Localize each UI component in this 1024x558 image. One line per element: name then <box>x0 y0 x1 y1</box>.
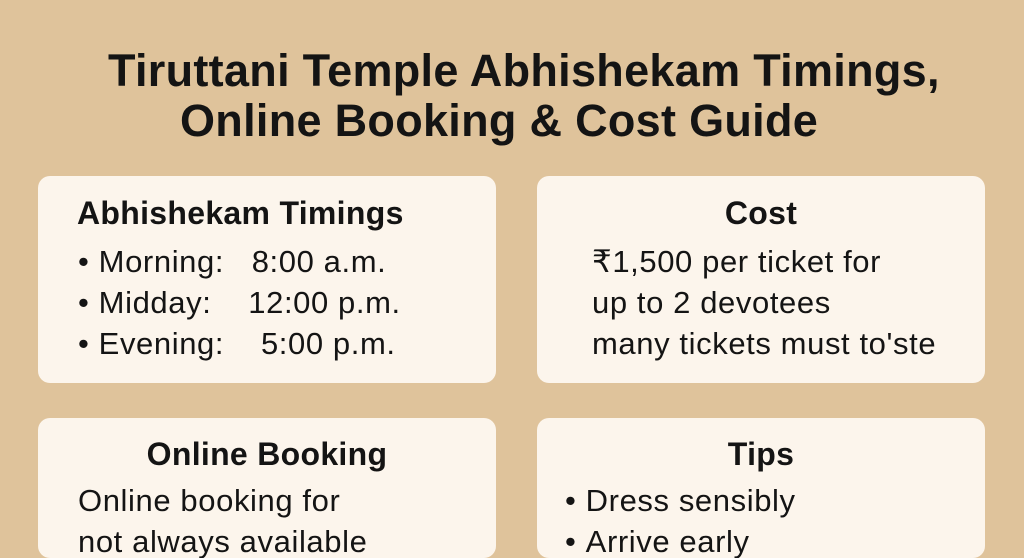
list: timings: • Midday: 12:00 p.m. <box>78 285 401 320</box>
text: cost: ₹1,500 per ticket for <box>592 244 881 279</box>
text: cost: many tickets must to'ste <box>592 326 936 361</box>
text: cost <box>592 244 936 361</box>
text: online booking: not always available <box>78 524 367 558</box>
text: online booking: Online booking for <box>78 483 340 518</box>
panel: online booking <box>38 418 496 558</box>
title: Online Booking & Cost Guide <box>180 95 818 146</box>
text: cost: up to 2 devotees <box>592 285 831 320</box>
title: Tiruttani Temple Abhishekam Timings, <box>108 45 940 96</box>
panel: tips <box>537 418 985 558</box>
title <box>108 45 940 146</box>
list: timings <box>78 244 401 361</box>
heading: online booking: Online Booking <box>147 436 387 472</box>
text: online booking <box>78 483 367 558</box>
heading: tips: Tips <box>728 436 794 472</box>
list: tips: • Arrive early <box>565 524 750 558</box>
heading: timings: Abhishekam Timings <box>77 195 404 231</box>
list: tips: • Dress sensibly <box>565 483 796 518</box>
panel: cost <box>537 176 985 383</box>
panel: timings <box>38 176 496 383</box>
list: tips <box>565 483 796 558</box>
heading: cost: Cost <box>725 195 797 231</box>
list: timings: • Morning: 8:00 a.m. <box>78 244 386 279</box>
list: timings: • Evening: 5:00 p.m. <box>78 326 396 361</box>
